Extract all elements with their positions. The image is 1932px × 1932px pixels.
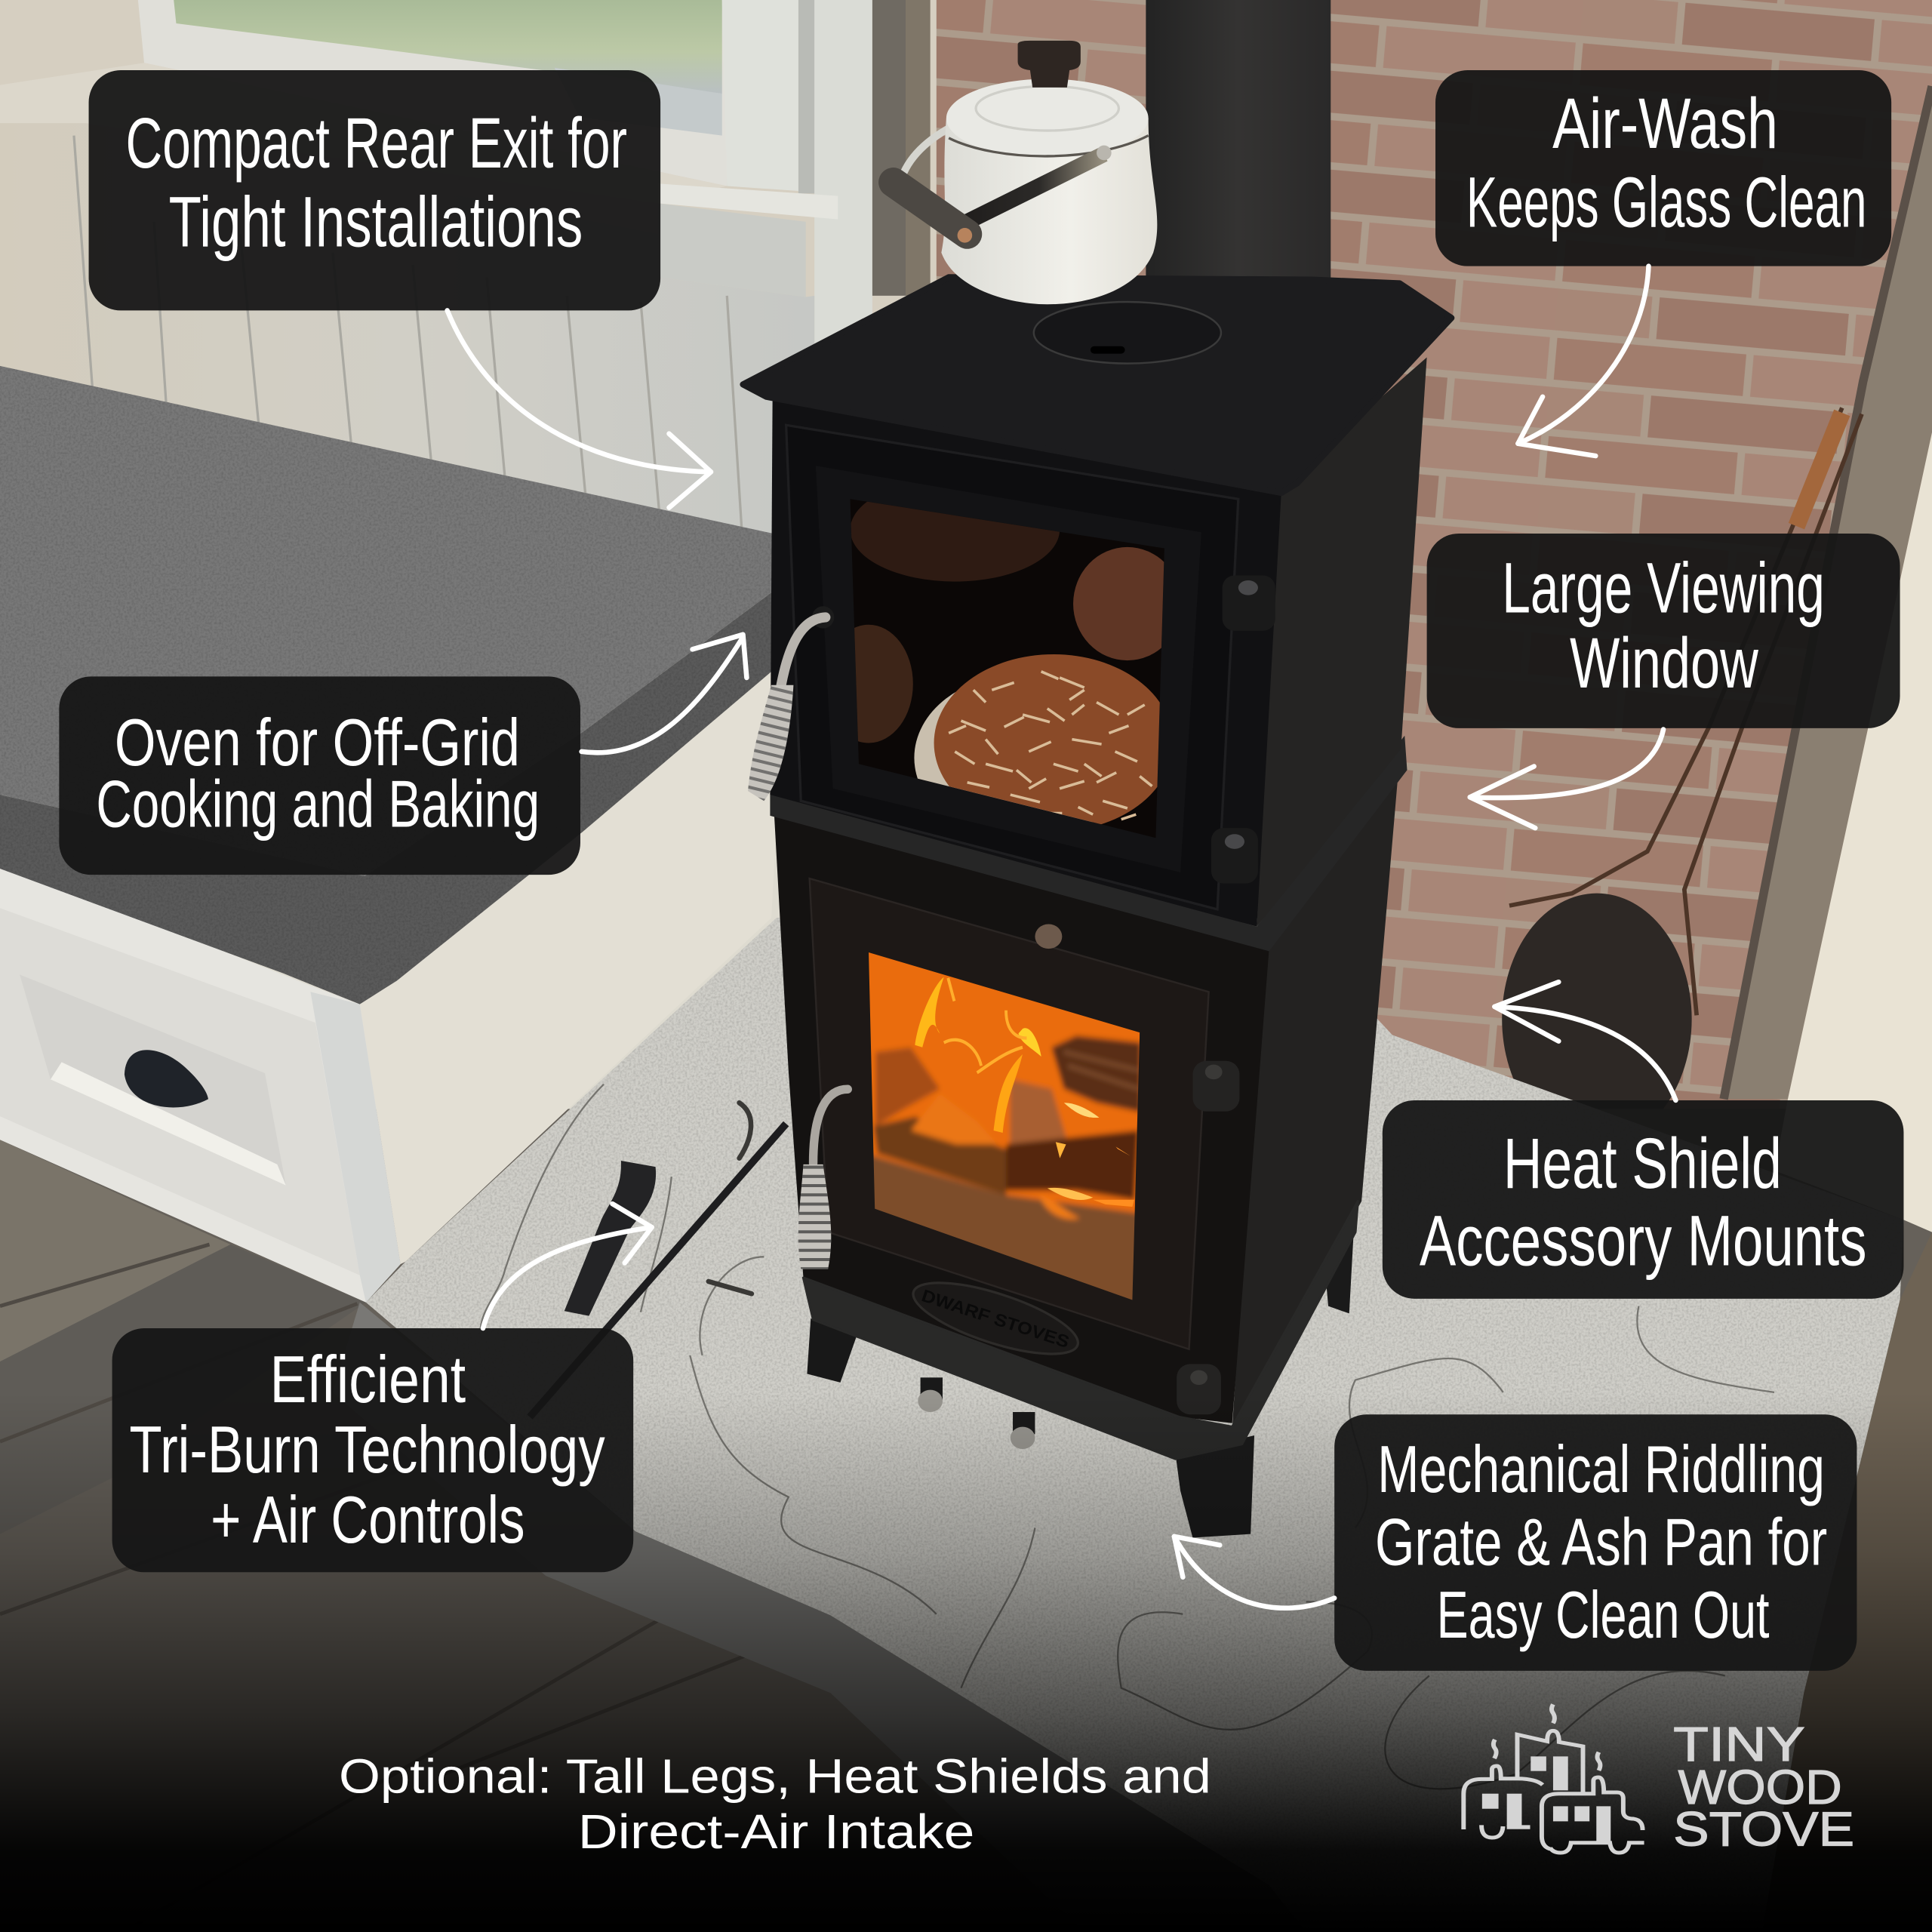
main pizza	[934, 654, 1173, 832]
window sill	[658, 183, 838, 220]
drawer recess	[20, 974, 286, 1186]
callout: heat shield	[1383, 1100, 1903, 1299]
kettle rim	[949, 136, 1149, 156]
kettle	[894, 41, 1157, 304]
floor boards	[0, 1244, 789, 1932]
right floor	[1762, 1232, 1932, 1932]
callout: riddling grate	[1334, 1414, 1857, 1671]
kettle lid	[946, 78, 1149, 158]
callout: tri-burn: Tri-Burn Technology	[129, 1412, 605, 1487]
arrow: to mounts	[1494, 982, 1675, 1100]
footer note: Optional: Tall Legs, Heat Shields and	[339, 1750, 1211, 1804]
pizzas in oven	[851, 501, 1164, 824]
kettle knob	[1018, 41, 1081, 88]
oven glass	[851, 499, 1164, 838]
window wall	[0, 0, 937, 555]
drawer pull	[125, 1050, 208, 1107]
cushion texture	[0, 357, 789, 1011]
rear pizza	[1073, 546, 1164, 661]
window glass	[174, 0, 722, 94]
jamb channel	[798, 0, 814, 193]
arrow: to oven glass	[1518, 266, 1648, 456]
lower stove body side	[1232, 770, 1398, 1429]
callout: compact rear exit: Tight Installations	[169, 183, 583, 263]
lower window pane	[555, 68, 722, 136]
callout: heat shield: Heat Shield	[1503, 1124, 1782, 1204]
cheese shreds	[949, 672, 1152, 820]
light floor plank lower	[0, 1244, 366, 1534]
callout: oven: Cooking and Baking	[96, 767, 540, 841]
callout: tri-burn: Efficient	[270, 1342, 466, 1417]
poker rod	[530, 1124, 786, 1417]
cushion side	[0, 586, 781, 1004]
white window frame	[138, 0, 727, 186]
hearth soot marks	[709, 1103, 752, 1294]
kettle grip	[894, 183, 968, 234]
kettle strap	[960, 154, 1104, 226]
ladle handles	[1509, 408, 1862, 1015]
oven side	[1257, 357, 1427, 927]
callout: oven	[59, 676, 580, 875]
oven door	[786, 425, 1238, 909]
poker tool	[565, 1161, 656, 1316]
beadboard grooves	[74, 136, 742, 530]
callout: air-wash	[1435, 70, 1891, 266]
white wall strip	[814, 0, 872, 555]
arrow: to oven	[582, 635, 746, 752]
drawer front	[0, 908, 360, 1275]
lower door hinge	[1192, 1061, 1239, 1112]
window jamb	[722, 0, 798, 191]
callout: air-wash: Air-Wash	[1552, 84, 1778, 164]
wood post left warm face	[906, 0, 931, 296]
dim reflected pizza	[851, 501, 1060, 581]
arrow: to rear exit	[448, 310, 711, 508]
bottom dark gradient	[0, 1392, 1932, 1932]
wood stove	[743, 0, 1451, 1538]
callout: large viewing window	[1427, 534, 1900, 728]
hearth cracks	[481, 1084, 1774, 1789]
room backing	[0, 542, 937, 1121]
bottom hinge knob	[1190, 1371, 1208, 1385]
wood post left	[872, 0, 927, 296]
ladle	[1502, 894, 1692, 1145]
callout: oven: Oven for Off-Grid	[115, 705, 520, 780]
logo wordmark: TINY	[1673, 1718, 1805, 1771]
bottom door hinge	[1177, 1364, 1221, 1414]
firebox glass and fire	[869, 952, 1140, 1300]
door rivet	[1035, 924, 1062, 949]
beadboard wall	[0, 123, 814, 555]
oven front	[770, 394, 1281, 927]
brick wall	[912, 0, 1932, 1109]
air knobs	[918, 1377, 1035, 1449]
logo wordmark: STOVE	[1673, 1803, 1854, 1857]
hearth texture	[367, 918, 1900, 1751]
left pizza	[854, 625, 913, 743]
post shadow	[1724, 86, 1932, 1099]
wooden ladle handle	[1796, 413, 1842, 526]
kettle body	[941, 118, 1157, 304]
arrow: to air controls	[483, 1204, 652, 1328]
hob lid	[1034, 302, 1221, 364]
oven door bevel	[816, 466, 1201, 872]
callout: tri-burn: + Air Controls	[211, 1482, 525, 1557]
drawer ledge	[51, 1062, 286, 1186]
back foot	[1322, 1201, 1355, 1313]
makers badge: DWARF STOVES	[919, 1285, 1072, 1352]
logo: tiny wood stove	[1463, 1704, 1854, 1857]
wood floor	[0, 1109, 1932, 1932]
oven hinges	[1211, 575, 1275, 884]
cushion top	[0, 366, 781, 876]
base plate	[803, 1201, 1358, 1459]
kettle lid ridge	[976, 86, 1118, 131]
hearth front face	[333, 1303, 1306, 1932]
kettle rivet	[1097, 146, 1112, 160]
callout: riddling grate: Easy Clean Out	[1437, 1577, 1769, 1652]
right foot	[1176, 1435, 1254, 1538]
stove top plate	[743, 277, 1451, 493]
left foot	[807, 1318, 857, 1383]
logo wordmark	[1673, 1718, 1854, 1857]
lower stove body front	[774, 807, 1269, 1423]
concrete hearth	[366, 863, 1903, 1932]
flue pipe	[1146, 0, 1331, 296]
logo icon	[1463, 1704, 1644, 1853]
callout: compact rear exit: Compact Rear Exit for	[126, 103, 627, 183]
makers badge	[906, 1269, 1085, 1368]
light floor plank	[0, 1140, 230, 1380]
footer note: Direct-Air Intake	[578, 1805, 974, 1859]
bench front	[0, 863, 401, 1303]
kettle back handle	[900, 127, 951, 185]
hob slot	[1091, 346, 1125, 354]
arrow: to window	[1470, 730, 1663, 828]
firebox handle	[798, 1089, 848, 1269]
footer note	[339, 1750, 1211, 1859]
wood post right	[1724, 86, 1932, 1099]
left wall trim	[0, 63, 727, 203]
grip end	[958, 228, 972, 243]
window apron	[658, 203, 806, 297]
firebox door	[810, 878, 1209, 1349]
lower door hinge knob	[1205, 1065, 1223, 1079]
bench right face	[360, 666, 779, 1264]
pizza stone	[914, 691, 1093, 823]
cream wall right	[1774, 432, 1932, 1232]
callout: large viewing window: Window	[1570, 623, 1758, 703]
callout: tri-burn	[112, 1328, 633, 1572]
callout: compact rear exit	[89, 70, 660, 310]
oven handle	[748, 606, 834, 807]
stove shelf plate	[770, 736, 1407, 951]
arrow: to grate	[1174, 1537, 1334, 1608]
logo wordmark: WOOD	[1678, 1761, 1842, 1814]
bench corner post	[310, 992, 401, 1303]
